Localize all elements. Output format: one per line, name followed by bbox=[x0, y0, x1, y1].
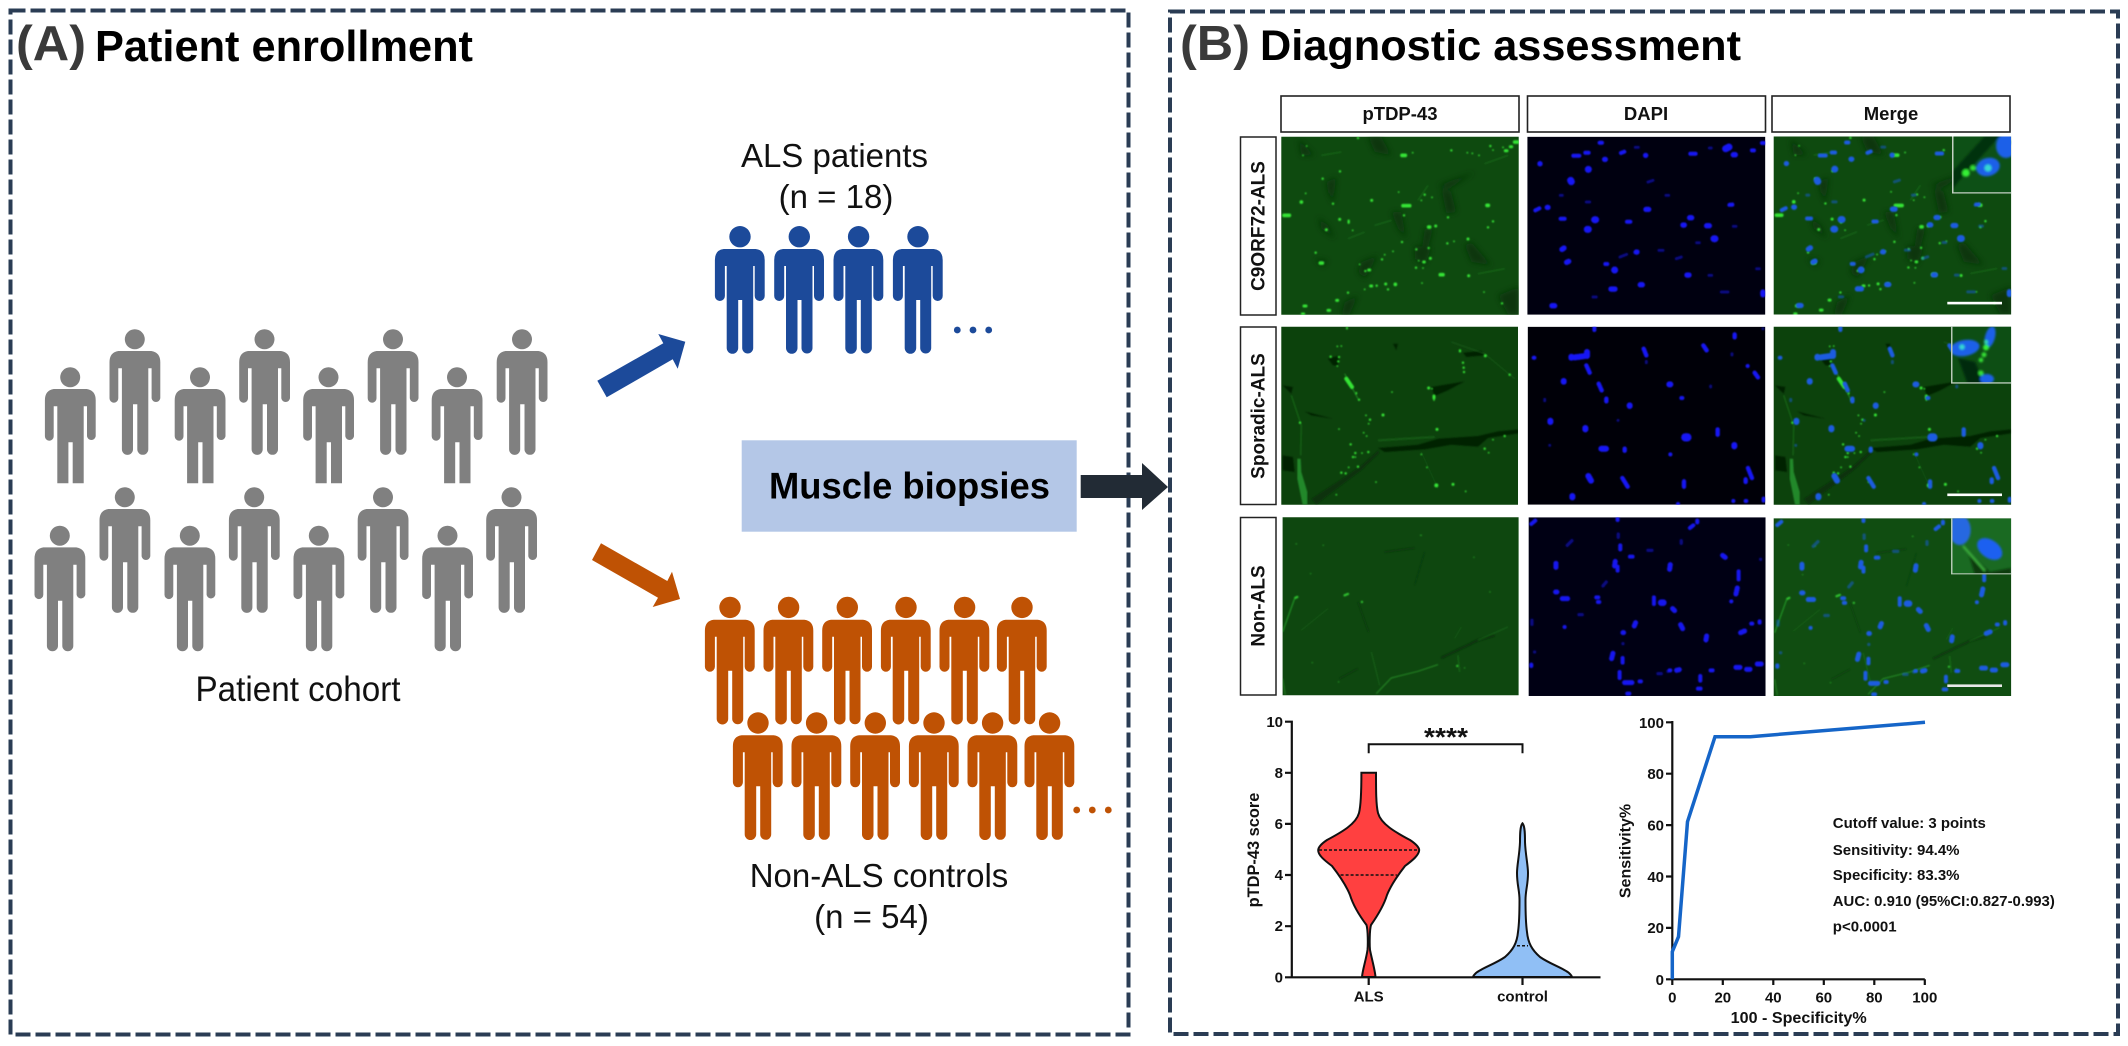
ROC x tick labels: 20 bbox=[1714, 989, 1731, 1006]
ROC y tick labels: 40 bbox=[1647, 869, 1664, 886]
ROC y tick labels: 60 bbox=[1647, 818, 1664, 834]
scale bar row 1 bbox=[1947, 302, 2002, 304]
ROC x tick labels: 0 bbox=[1668, 989, 1676, 1006]
control violin bbox=[1473, 823, 1572, 977]
violin x labels bbox=[1354, 989, 1548, 1006]
panel B heading: Diagnostic assessment bbox=[1260, 22, 1741, 70]
ROC statistics: AUC: 0.910 (95%CI:0.827-0.993) bbox=[1833, 893, 2055, 910]
panel B letter: (B) bbox=[1180, 17, 1250, 71]
panel A heading: Patient enrollment bbox=[95, 23, 473, 71]
ROC y tick labels bbox=[1639, 715, 1664, 989]
ROC x tick labels: 100 bbox=[1912, 989, 1937, 1006]
violin x labels: ALS bbox=[1354, 989, 1384, 1006]
panel B dashed border bbox=[1170, 12, 2118, 1034]
ROC y tick labels: 100 bbox=[1639, 715, 1664, 732]
column headers: pTDP-43 bbox=[1362, 103, 1438, 124]
significance bracket: **** bbox=[1424, 722, 1469, 752]
column headers bbox=[1281, 96, 2010, 132]
violin y tick labels: 4 bbox=[1275, 867, 1284, 884]
violin y tick labels: 0 bbox=[1275, 970, 1283, 986]
ROC y tick labels: 20 bbox=[1647, 920, 1664, 937]
box: muscle biopsies: Muscle biopsies bbox=[769, 464, 1050, 506]
micrograph: C9ORF72-ALS pTDP-43 bbox=[1281, 136, 1519, 315]
arrow: cohort to non-ALS controls bbox=[592, 543, 680, 607]
micrograph: C9ORF72-ALS merge bbox=[1774, 136, 2012, 314]
ROC x axis title: 100 - Specificity% bbox=[1731, 1010, 1867, 1027]
ROC x tick labels: 40 bbox=[1765, 989, 1782, 1006]
ROC curve line bbox=[1672, 722, 1925, 979]
panel A dashed border bbox=[10, 10, 1128, 1034]
violin y tick labels: 2 bbox=[1275, 918, 1283, 935]
micrograph: non-ALS pTDP-43 bbox=[1282, 517, 1519, 696]
violin y tick labels bbox=[1266, 714, 1284, 986]
ROC statistics: p<0.0001 bbox=[1833, 919, 1897, 936]
scale bar row 3 bbox=[1947, 684, 2002, 687]
ROC y axis title: Sensitivity% bbox=[1618, 804, 1634, 898]
arrow: muscle biopsies to diagnostic assessment bbox=[1081, 463, 1168, 510]
ROC statistics: Specificity: 83.3% bbox=[1833, 867, 1960, 884]
micrograph: C9ORF72-ALS DAPI bbox=[1527, 136, 1766, 315]
ROC y tick labels: 80 bbox=[1647, 766, 1664, 783]
ROC statistics bbox=[1833, 815, 2055, 936]
micrograph: sporadic-ALS DAPI bbox=[1528, 326, 1766, 505]
column headers: Merge bbox=[1864, 103, 1918, 124]
significance bracket bbox=[1369, 722, 1522, 753]
panel A: patient enrollment bbox=[10, 10, 1128, 1034]
label: non-ALS controls count: (n = 54) bbox=[814, 898, 929, 935]
panel A letter: (A) bbox=[16, 17, 86, 71]
ROC x tick labels: 60 bbox=[1815, 989, 1832, 1006]
label: non-ALS controls count: Non-ALS controls bbox=[750, 857, 1008, 894]
row labels bbox=[1240, 137, 1276, 695]
inset: sporadic-ALS merge zoom bbox=[1951, 326, 2011, 384]
arrow: cohort to ALS patients bbox=[597, 334, 685, 397]
label: ALS patients count: ALS patients bbox=[741, 137, 928, 174]
micrograph: non-ALS DAPI bbox=[1528, 517, 1766, 696]
micrograph: sporadic-ALS pTDP-43 bbox=[1281, 326, 1518, 505]
icon group: patient cohort people bbox=[34, 329, 548, 651]
ROC statistics: Sensitivity: 94.4% bbox=[1833, 842, 1960, 859]
inset: non-ALS merge zoom bbox=[1951, 518, 2011, 574]
micrograph: sporadic-ALS merge bbox=[1774, 326, 2012, 505]
panel B: diagnostic assessment bbox=[1170, 12, 2118, 1034]
scale bar row 2 bbox=[1947, 494, 2002, 496]
ROC x tick labels: 80 bbox=[1866, 989, 1883, 1006]
box: muscle biopsies bbox=[742, 440, 1077, 532]
violin y axis title: pTDP-43 score bbox=[1245, 793, 1263, 907]
label: ALS patients count: (n = 18) bbox=[779, 178, 893, 215]
ALS violin bbox=[1318, 773, 1419, 977]
row labels: C9ORF72-ALS bbox=[1248, 161, 1270, 291]
micrograph: non-ALS merge bbox=[1774, 518, 2012, 696]
ROC y tick labels: 0 bbox=[1656, 972, 1664, 989]
inset: C9ORF72-ALS merge zoom bbox=[1952, 136, 2011, 194]
violin y tick labels: 8 bbox=[1275, 765, 1283, 782]
violin y tick labels: 6 bbox=[1275, 816, 1283, 833]
icon group: non-ALS controls people bbox=[705, 597, 1112, 840]
ROC x tick labels bbox=[1668, 989, 1937, 1006]
label: patient cohort: Patient cohort bbox=[196, 670, 401, 709]
column headers: DAPI bbox=[1624, 103, 1668, 124]
ROC statistics: Cutoff value: 3 points bbox=[1833, 815, 1986, 832]
row labels: Non-ALS bbox=[1248, 565, 1270, 647]
violin chart: pTDP-43 score bbox=[1245, 714, 1600, 1006]
ROC curve chart bbox=[1618, 715, 2055, 1027]
violin x labels: control bbox=[1497, 989, 1548, 1006]
row labels: Sporadic-ALS bbox=[1248, 353, 1270, 479]
icon group: ALS patients people bbox=[715, 226, 992, 354]
violin y tick labels: 10 bbox=[1266, 714, 1283, 731]
